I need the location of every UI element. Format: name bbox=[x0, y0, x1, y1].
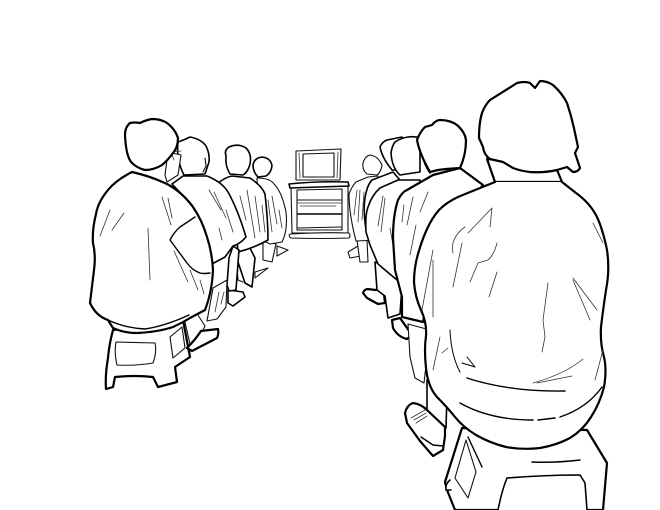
right row: third from far person with shoes bbox=[363, 137, 420, 339]
left row: front person bbox=[90, 119, 218, 389]
foot bbox=[184, 312, 218, 351]
jacket body bbox=[90, 172, 213, 333]
television on cabinet bbox=[289, 149, 350, 238]
left row: second person bbox=[172, 137, 246, 321]
left row: third person bbox=[218, 145, 268, 287]
right row: far person bbox=[348, 155, 382, 262]
jacket body bbox=[414, 182, 608, 449]
right row: second from far person bbox=[364, 137, 405, 245]
head and hair bbox=[479, 81, 580, 172]
right row: lower leg and shoe bbox=[405, 324, 447, 456]
neck bbox=[487, 159, 562, 182]
cabinet bbox=[289, 182, 350, 238]
right row: second from front person bbox=[393, 120, 483, 322]
right front stool bbox=[445, 428, 607, 510]
head and hair bbox=[125, 119, 181, 182]
icon: television set bbox=[296, 149, 341, 180]
right front person bbox=[414, 81, 608, 449]
left row: fourth person bbox=[253, 157, 288, 262]
stool bbox=[106, 320, 190, 389]
